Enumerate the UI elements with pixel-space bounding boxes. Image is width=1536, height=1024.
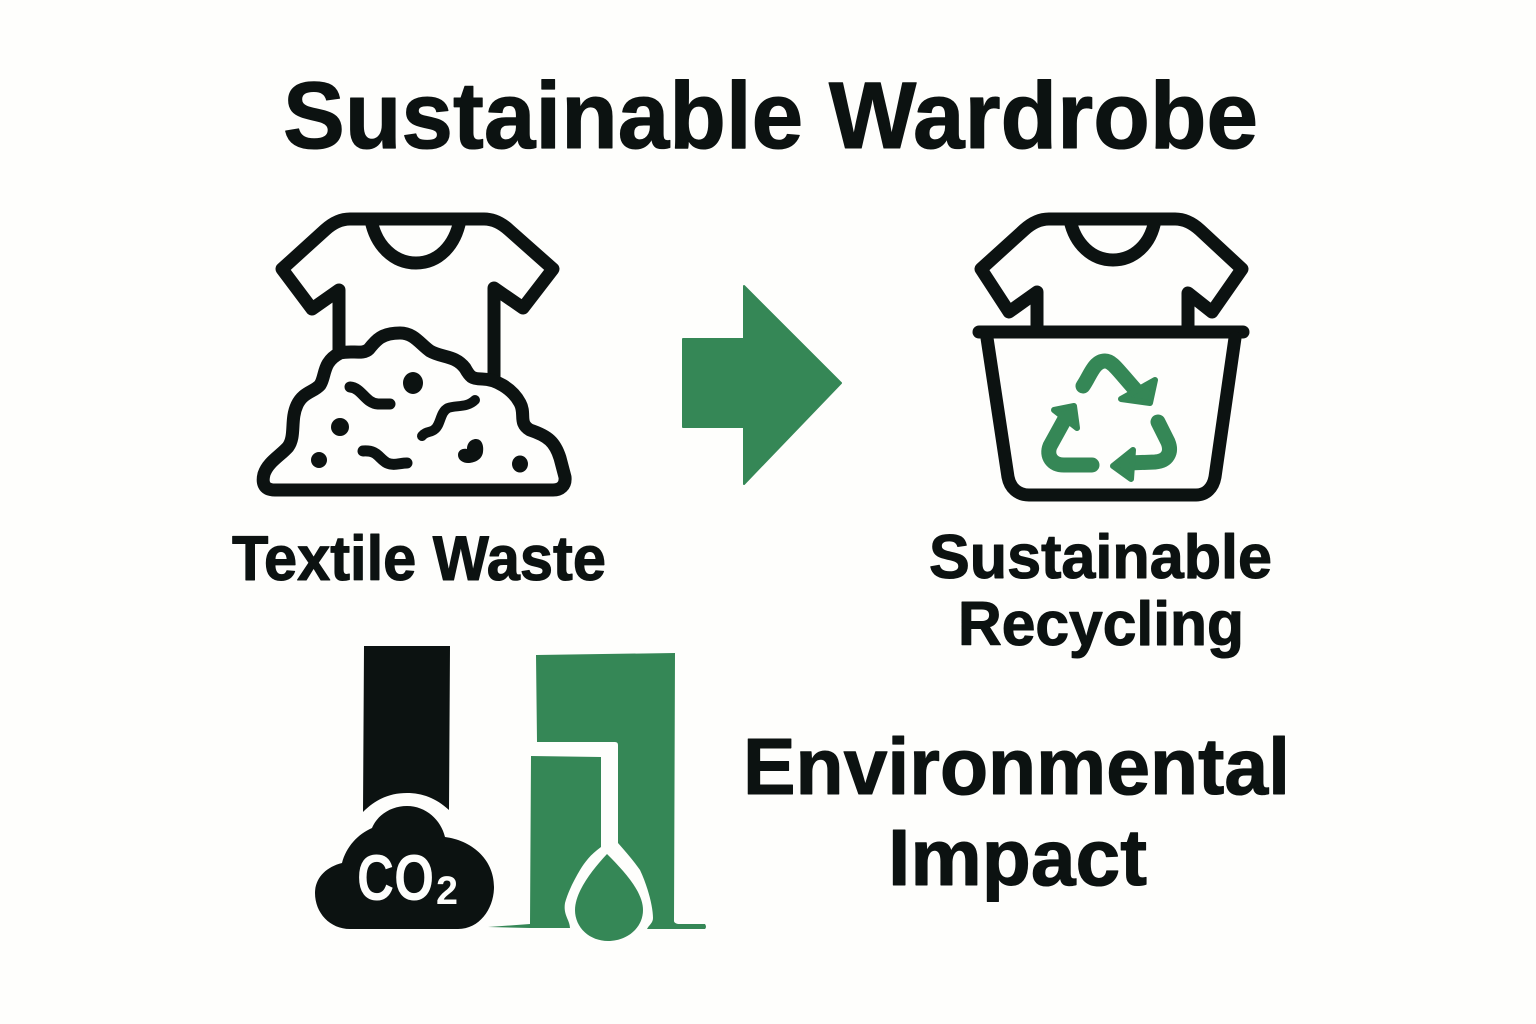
water drop [575, 854, 643, 941]
label: environmental impact: Impact [888, 813, 1147, 902]
label: textile waste: Textile Waste [232, 524, 606, 594]
icon: t-shirt in recycling basket [979, 219, 1243, 495]
waste squiggles [350, 387, 475, 464]
label: environmental impact [743, 722, 1290, 902]
recycling arrow left [1049, 417, 1092, 465]
label: sustainable recycling: Sustainable [929, 523, 1272, 592]
arrow [683, 286, 841, 484]
basket body [987, 338, 1235, 495]
label: environmental impact: Environmental [743, 722, 1290, 811]
label: sustainable recycling [929, 523, 1272, 659]
recycling arrow right [1128, 422, 1169, 463]
icon: black smokestack with CO2 cloud [315, 646, 494, 929]
t-shirt collar [371, 220, 460, 263]
label: sustainable recycling: Recycling [958, 590, 1244, 659]
waste pile outline [263, 333, 565, 490]
t-shirt outline [282, 219, 553, 378]
smokestack [363, 646, 450, 812]
recycling arrow top [1083, 361, 1141, 396]
t-shirt collar [1070, 220, 1155, 260]
icon: green factory with water drop [488, 653, 706, 941]
waste pile dots [311, 372, 528, 472]
cloud [315, 806, 494, 929]
icon: recycling symbol [1049, 361, 1169, 479]
basket rim [979, 326, 1243, 338]
CO2 label: CO [357, 841, 434, 914]
icon: t-shirt on textile waste pile [263, 219, 565, 490]
subscript 2: 2 [436, 869, 458, 913]
tall building [536, 653, 706, 929]
title: Sustainable Wardrobe [283, 63, 1258, 169]
t-shirt outline [981, 219, 1242, 328]
short building [488, 756, 601, 928]
